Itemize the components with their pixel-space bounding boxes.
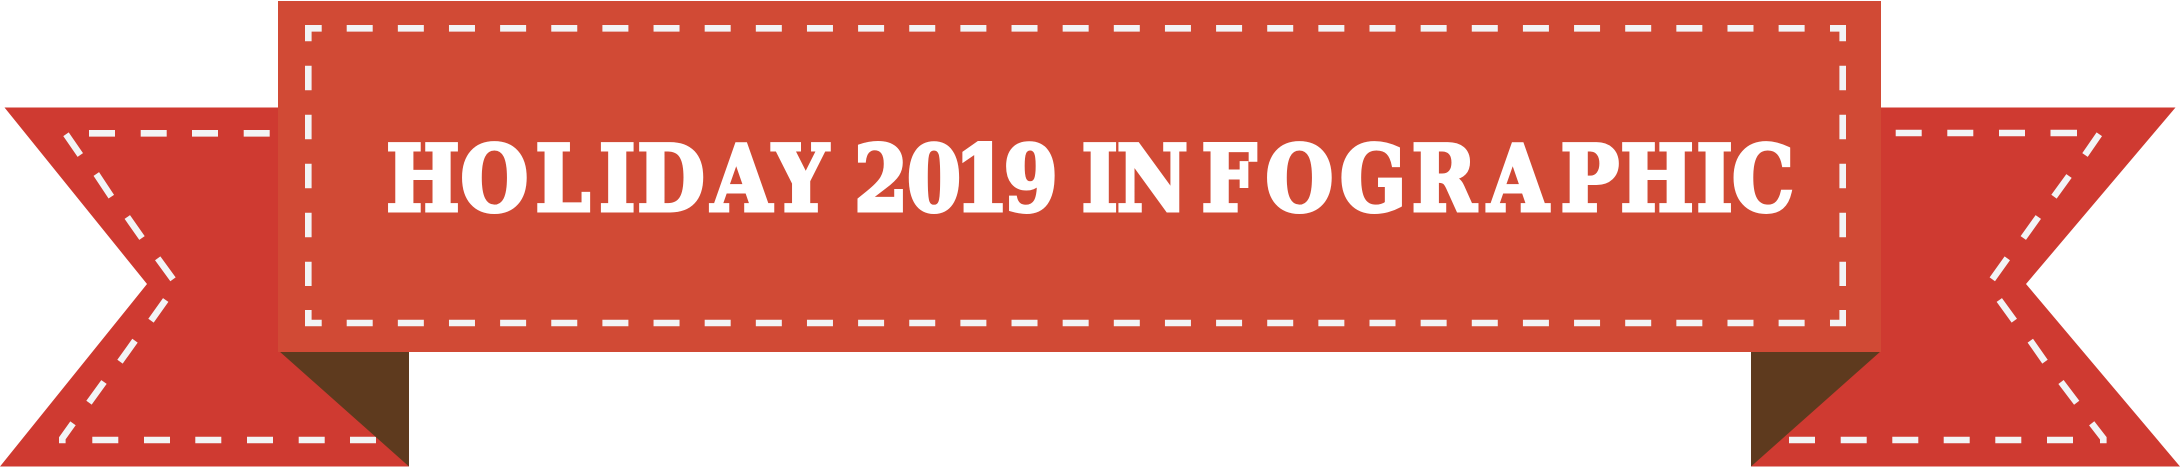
main banner panel — [278, 1, 1881, 352]
left fold shadow — [279, 351, 409, 466]
right fold shadow — [1751, 351, 1881, 466]
title: HOLIDAY 2019 INFOGRAPHIC — [386, 126, 1794, 232]
right ribbon tail — [1751, 108, 2180, 466]
left ribbon tail — [0, 108, 409, 466]
stitched border — [308, 28, 1843, 323]
